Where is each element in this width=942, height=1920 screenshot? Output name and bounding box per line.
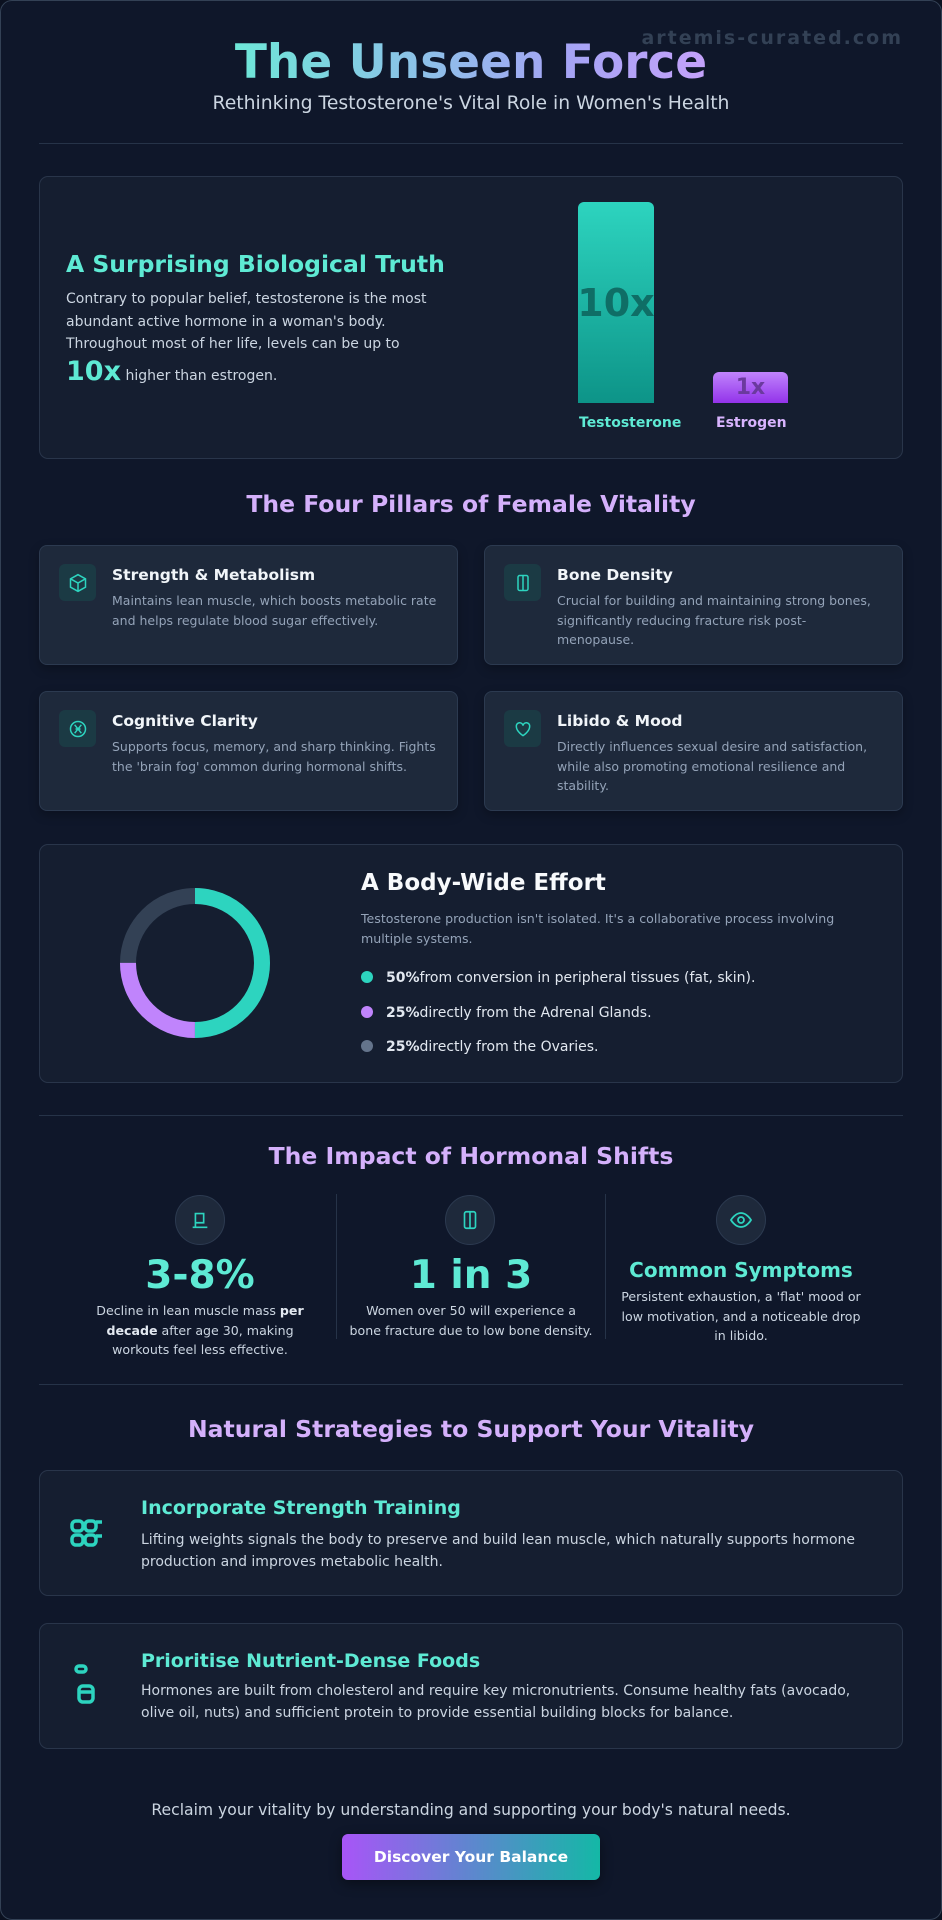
- bar: estrogen: [713, 372, 788, 403]
- stat: fracture: 1 in 3: [410, 1253, 532, 1298]
- bar: testosterone: 10x: [577, 280, 655, 324]
- button: discover: [342, 1834, 600, 1880]
- icon: cube: [59, 564, 96, 601]
- legend: [361, 970, 755, 1055]
- icon: bone: [504, 564, 541, 601]
- legend: 25%directly from the Adrenal Glands.: [386, 1005, 652, 1021]
- watermark: artemis-curated.com: [641, 27, 903, 49]
- strategy: strength training: Incorporate Strength Training: [141, 1497, 461, 1519]
- legend: 50%from conversion in peripheral tissues (fat, skin).: [386, 970, 755, 986]
- heading: four pillars: The Four Pillars of Female Vitality: [246, 490, 696, 518]
- title: The Unseen Force: [235, 35, 707, 90]
- icon: muscle: [175, 1195, 225, 1245]
- strategy: nutrient foods: [39, 1623, 903, 1749]
- text: truth body: 10x higher than estrogen.: [66, 356, 277, 386]
- stat: symptoms: [621, 1195, 861, 1343]
- stat: muscle: Decline in lean muscle mass per decade after age 30, making workouts feel less effective.: [96, 1303, 304, 1357]
- card: bone: Bone Density: [557, 566, 673, 584]
- card: bone: [484, 545, 903, 665]
- icon: food: [74, 1664, 95, 1704]
- legend: 25%directly from the Ovaries.: [386, 1039, 599, 1055]
- strategy: strength training: Lifting weights signals the body to preserve and build lean muscle, which naturally supports hormone production and improves metabolic health.: [141, 1532, 855, 1570]
- card: bone: menopause.: [557, 632, 634, 647]
- icon: heart: [504, 710, 541, 747]
- strategy: nutrient foods: Hormones are built from cholesterol and require key micronutrients. Consume healthy fats (avocado, olive oil, nuts) and sufficient protein to provide essential building blocks for balance.: [141, 1683, 850, 1721]
- card: strength: [39, 545, 458, 665]
- bar chart: testosterone vs estrogen: [577, 202, 788, 431]
- panel: body-wide effort: [39, 844, 903, 1083]
- stat: fracture: [350, 1195, 592, 1338]
- label: estrogen: Estrogen: [716, 415, 787, 431]
- card: cognitive: Supports focus, memory, and sharp thinking. Fights the 'brain fog' common during hormonal shifts.: [112, 739, 436, 774]
- strategy: strength training: [39, 1470, 903, 1596]
- card: libido: Directly influences sexual desire and satisfaction, while also promoting emotional resilience and stability.: [557, 739, 867, 793]
- stat: symptoms: Common Symptoms: [629, 1258, 853, 1282]
- label: testosterone: Testosterone: [579, 415, 681, 431]
- panel: biological truth: [39, 176, 903, 459]
- icon: dumbbell: [70, 1519, 102, 1547]
- heading: natural strategies: Natural Strategies to Support Your Vitality: [188, 1415, 754, 1443]
- card: libido: Libido & Mood: [557, 712, 682, 730]
- icon: bone: [445, 1195, 495, 1245]
- card: cognitive: Cognitive Clarity: [112, 712, 258, 730]
- heading: impact: The Impact of Hormonal Shifts: [269, 1142, 673, 1170]
- stat: fracture: Women over 50 will experience a: [366, 1303, 576, 1318]
- footer text: Reclaim your vitality by understanding and supporting your body's natural needs.: [151, 1801, 791, 1819]
- subtitle: Rethinking Testosterone's Vital Role in Women's Health: [213, 93, 729, 114]
- stat: muscle: [96, 1195, 304, 1357]
- card: cognitive: [39, 691, 458, 811]
- text: truth body: [66, 291, 426, 386]
- icon: eye: [716, 1195, 766, 1245]
- card: bone: significantly reducing fracture risk post-: [557, 612, 806, 628]
- stat: symptoms: Persistent exhaustion, a 'flat' mood or low motivation, and a noticeable drop in libido.: [621, 1289, 861, 1343]
- strategy: nutrient foods: Prioritise Nutrient-Dense Foods: [141, 1650, 480, 1672]
- icon: brain: [59, 710, 96, 747]
- heading: surprising truth: A Surprising Biological Truth: [66, 250, 445, 278]
- donut chart: [120, 888, 270, 1038]
- card: strength: Strength & Metabolism: [112, 566, 315, 584]
- heading: body-wide: A Body-Wide Effort: [361, 870, 606, 896]
- stat: muscle: 3-8%: [145, 1253, 255, 1298]
- card: libido: [484, 691, 903, 811]
- stat: fracture: bone fracture due to low bone density.: [350, 1322, 592, 1338]
- text: body-wide desc: Testosterone production isn't isolated. It's a collaborative process involving multiple systems.: [361, 911, 834, 946]
- card: bone: Crucial for building and maintaining strong bones,: [557, 593, 871, 608]
- bar: estrogen: 1x: [736, 375, 765, 400]
- card: strength: Maintains lean muscle, which boosts metabolic rate and helps regulate blood sugar effectively.: [112, 593, 436, 628]
- text: truth body: Contrary to popular belief, testosterone is the most abundant active hormone in a woman's body. Throughout most of her life, levels can be up to: [66, 291, 426, 352]
- button: discover: Discover Your Balance: [374, 1848, 568, 1866]
- bar: testosterone: [578, 202, 654, 403]
